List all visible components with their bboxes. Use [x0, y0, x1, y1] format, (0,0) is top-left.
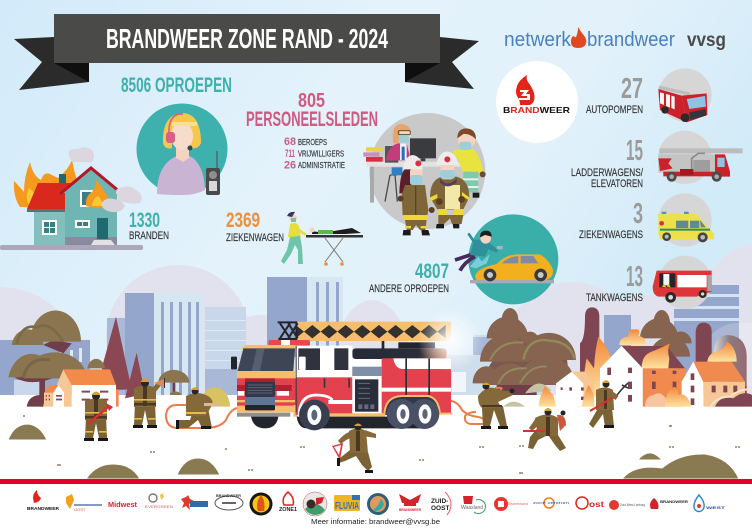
logo: oost [576, 497, 604, 509]
logo: fluvia [334, 495, 360, 512]
vvsg logo: vvsg [687, 30, 726, 51]
icon: personnel group [363, 113, 486, 235]
other calls stat: ANDERE OPROEPEN [369, 283, 449, 295]
logo: antwerpen [399, 494, 421, 512]
vehicle: ziekenwagens: 3 [633, 198, 643, 230]
logo: zuid-oost: ZUID- [431, 498, 448, 505]
vehicle: ladderwagens: ELEVATOREN [591, 178, 643, 190]
logo: zone oost: OOST [74, 507, 86, 512]
house 2 [600, 346, 685, 407]
fires stat [129, 209, 169, 242]
icon: brandweer logo: BRAND WEER [503, 105, 570, 115]
logo: waasland [461, 496, 485, 514]
grass specks [23, 415, 740, 474]
logo: zuid-west limburg: Zuid-West Limburg [620, 503, 645, 507]
left tree [8, 310, 87, 407]
top right flame [707, 342, 737, 362]
firefighter with pike [589, 380, 628, 428]
fires stat: BRANDEN [129, 230, 169, 242]
right town with burning houses [473, 307, 752, 407]
netwerk brandweer logo [504, 27, 675, 51]
calls stat: 8506 OPROEPEN [121, 74, 232, 97]
personnel stat: 805 [298, 90, 325, 112]
vehicle: ladderwagens: 15 [626, 135, 643, 167]
vehicle: autopompen: AUTOPOMPEN [586, 104, 643, 116]
pines [102, 317, 145, 398]
compartment panel [352, 359, 382, 415]
logo: brandweer: BRANDWEER [27, 506, 60, 511]
tree cluster left [473, 308, 576, 407]
rear body [382, 358, 451, 413]
ladder [278, 322, 451, 341]
personnel stat: 26 [284, 160, 296, 172]
vehicle: autopompen: 27 [621, 73, 643, 105]
footer logos row [27, 490, 726, 516]
hoses [166, 388, 502, 428]
logo: zone 1 [279, 492, 297, 513]
personnel stat: VRIJWILLIGERS [298, 150, 344, 158]
logo: brandweer hulpverlening: BRANDWEER [660, 499, 688, 504]
footer background [0, 484, 752, 531]
logo: waasland: Waasland [461, 505, 483, 511]
logo: round flame [367, 493, 389, 515]
logo: centrum [533, 498, 569, 508]
logo: centrum: zone centrum [533, 501, 569, 505]
vehicle: tankwagens: TANKWAGENS [586, 292, 643, 304]
ambulance stat: 2369 [226, 209, 260, 232]
title: BRANDWEER ZONE RAND - 2024 [106, 23, 388, 54]
icon: brandweer logo [496, 61, 578, 143]
office woman [386, 124, 411, 161]
vehicle: tankwagens [586, 256, 712, 309]
logo: brandweer [27, 490, 60, 511]
other calls stat: 4807 [415, 260, 449, 283]
firefighter with hose [478, 382, 514, 429]
personnel stat: 68 [284, 136, 296, 148]
village house [44, 369, 119, 407]
glow behind ladder [418, 308, 482, 372]
firefighter with megaphone [133, 378, 165, 428]
footer contact text: Meer informatie: brandweer@vvsg.be [311, 517, 440, 526]
small fires [538, 385, 692, 407]
ground [0, 395, 752, 480]
personnel stat: PERSONEELSLEDEN [246, 108, 378, 131]
house 3 [682, 362, 752, 407]
logo: zuid-west limburg [609, 500, 645, 510]
logo: zone oost [66, 494, 102, 512]
fires stat: 1330 [129, 209, 160, 232]
small tree [158, 370, 189, 395]
other calls stat [369, 260, 449, 295]
skyline background [0, 243, 752, 444]
logo: oval brandweer: BRANDWEER [216, 494, 242, 498]
big flame behind houses [583, 337, 612, 397]
logo: brandweer hulpverlening [650, 498, 688, 509]
personnel stat: 711 [285, 148, 295, 160]
icon: car accident [455, 214, 558, 304]
undercarriage [297, 417, 438, 428]
firefighter with axe [84, 392, 113, 441]
icon: paramedic with stretcher [281, 212, 363, 266]
running firefighter with bucket [332, 424, 376, 473]
personnel stat: BEROEPS [298, 138, 327, 147]
netwerk brandweer logo: brandweer [587, 29, 675, 51]
netwerk brandweer logo: netwerk [504, 29, 572, 51]
office man [452, 128, 486, 198]
logo: oost: ost [589, 500, 604, 509]
logo: black flame circle [250, 492, 272, 516]
title banner [14, 14, 479, 90]
vehicle: ladderwagens: LADDERWAGENS/ [571, 167, 644, 179]
logo: westhoek: WEST [706, 505, 726, 510]
logo: everbeeland: EVERGREEN [145, 504, 173, 509]
personnel stat: ADMINISTRATIE [298, 161, 345, 170]
logo: rivierenland: Rivierenland [508, 502, 528, 506]
front wheel [299, 395, 332, 417]
logo: midwest: Midwest [108, 502, 138, 509]
firefighter one [398, 155, 435, 235]
icon: dispatcher [136, 104, 228, 195]
door and windows [296, 346, 352, 378]
tree cluster right [640, 310, 692, 357]
logo: rivierenland [494, 497, 528, 511]
vehicle: ladderwagens [571, 131, 743, 190]
house 1 [556, 372, 594, 407]
logo: round crest [303, 492, 327, 516]
rear wheels [387, 399, 417, 429]
office desk and files [363, 138, 477, 203]
ambulance stat [226, 209, 284, 244]
logo: fluvia red splash [181, 495, 208, 510]
vehicle: tankwagens: 13 [626, 261, 643, 293]
logo: westhoek [694, 495, 726, 512]
red footer bar [0, 479, 752, 484]
roof flame [642, 343, 670, 368]
vehicle: ziekenwagens [579, 193, 714, 247]
vehicle: autopompen [586, 68, 712, 122]
logo: zuid-oost [431, 492, 451, 515]
background sky [0, 0, 752, 396]
logo: zone 1: ZONE1 [279, 507, 297, 513]
fire truck [231, 322, 452, 430]
logo: antwerpen: BRANDWEER [399, 507, 421, 512]
logo: everbeeland [145, 493, 173, 509]
icon: burning house [0, 147, 143, 250]
logo: zuid-oost: OOST [431, 505, 449, 512]
rear wheel arch [384, 396, 452, 415]
personnel stat [246, 90, 378, 172]
running firefighter with tool [523, 408, 566, 451]
logo: fluvia: FLUVIA [335, 501, 359, 512]
logo: oval brandweer [215, 494, 243, 510]
firefighter two [430, 151, 469, 228]
ground mounds [8, 424, 739, 479]
vehicle: ziekenwagens: ZIEKENWAGENS [579, 229, 643, 241]
ambulance stat: ZIEKENWAGEN [226, 232, 284, 244]
kneeling firefighter [176, 388, 221, 429]
left scene: trees, pines and village house [8, 310, 230, 407]
cab [241, 345, 297, 349]
